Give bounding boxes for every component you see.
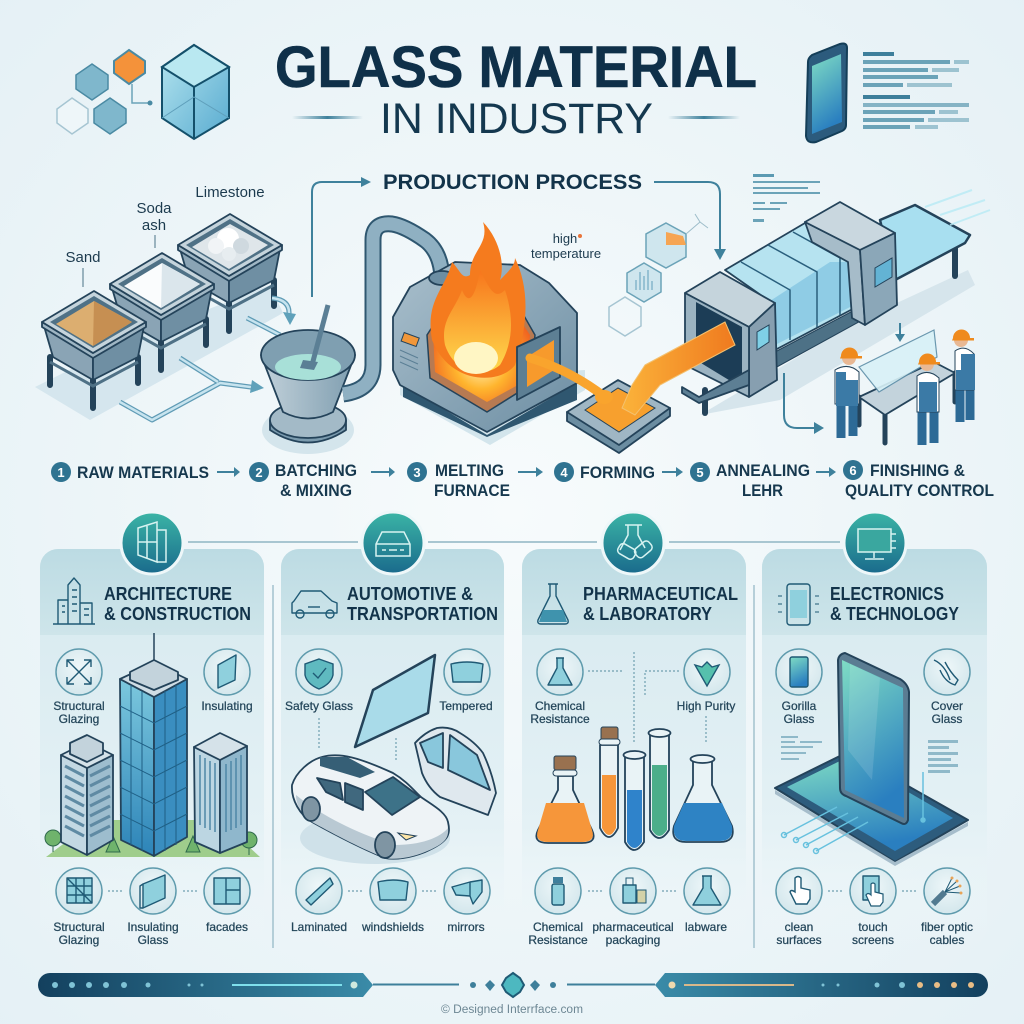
step 4 (554, 462, 655, 482)
icon: clean surfaces (776, 868, 822, 914)
step 1: RAW MATERIALS (77, 463, 209, 482)
arrow: lehr to finishing (784, 373, 824, 434)
icon: tablet with text lines (806, 44, 969, 142)
worker 1 (835, 348, 862, 438)
heading text (347, 584, 498, 624)
bin: sand (42, 291, 146, 408)
subtitle: IN INDUSTRY (380, 95, 653, 143)
illustration: green tube (648, 729, 670, 838)
illustration: shadow under lehr (700, 270, 975, 415)
bin: limestone (178, 214, 282, 331)
labels: cables (930, 933, 964, 947)
arrow (518, 467, 543, 477)
step 6: QUALITY CONTROL (845, 481, 994, 500)
label: soda ash: Soda (136, 200, 172, 217)
label: Chemical (535, 699, 585, 713)
process steps (51, 460, 994, 500)
step 6 (843, 460, 994, 500)
label: Tempered (439, 699, 493, 713)
heading text: & LABORATORY (583, 604, 712, 624)
illustration: pipe (343, 224, 442, 394)
illustration: raw material bins (35, 214, 296, 420)
arrow (662, 467, 683, 477)
illustration: right building (194, 733, 247, 853)
label: soda ash (136, 200, 172, 248)
heading icon: flask (538, 584, 568, 624)
heading icon: buildings (53, 578, 95, 624)
footer bar (38, 973, 988, 997)
illustration: annealing lehr (682, 202, 897, 413)
step 6: FINISHING & (870, 461, 965, 480)
labels: pharmaceutical (592, 920, 674, 934)
icon: laminated (296, 868, 342, 914)
labels (776, 920, 973, 947)
labels: Resistance (528, 933, 588, 947)
labels: packaging (606, 933, 660, 947)
labels: clean (785, 920, 813, 934)
left bar (38, 973, 373, 997)
icon: windshields (370, 868, 416, 914)
label: High Purity (677, 699, 735, 713)
illustration: tablet (775, 752, 968, 866)
labels: Insulating (127, 920, 179, 934)
entry housing (685, 272, 775, 327)
label (931, 699, 963, 726)
labels: mirrors (447, 920, 485, 934)
label: limestone: Limestone (195, 184, 265, 201)
panel: automotive and transportation (281, 512, 504, 945)
icon: structural glazing bottom (56, 868, 102, 914)
flame (431, 222, 526, 378)
center ornament (373, 973, 655, 997)
arrow: down to table (895, 323, 905, 342)
icon: vial (535, 868, 581, 914)
icon: insulating glass bottom (130, 868, 176, 914)
labels: Laminated (291, 920, 347, 934)
worker 2 (917, 354, 940, 445)
illustration: phone (838, 653, 909, 824)
icon: packaging (610, 868, 656, 914)
label: Gorilla (782, 699, 817, 713)
arrow: heading to lehr (654, 182, 726, 260)
title: GLASS MATERIAL (275, 35, 757, 100)
heading text (830, 584, 959, 624)
ground (46, 820, 260, 857)
heading text: ARCHITECTURE (104, 584, 232, 604)
illustration: mixing bowl (261, 305, 355, 454)
icon: gorilla glass (776, 649, 822, 695)
labels: Chemical (533, 920, 583, 934)
label: Glazing (59, 712, 99, 726)
right bar (655, 973, 988, 997)
label: high temperature: high (553, 231, 577, 246)
label (53, 699, 105, 726)
step 3 (407, 461, 510, 500)
icon: cover glass (924, 649, 970, 695)
illustration: car (292, 755, 450, 864)
labels: Structural (53, 920, 105, 934)
label (782, 699, 817, 726)
labels: surfaces (776, 933, 822, 947)
illustration: finishing table and workers (835, 330, 975, 445)
label: high temperature: temperature (531, 246, 601, 261)
labels: fiber optic (921, 920, 973, 934)
label: Glass (932, 712, 962, 726)
circuit lines (782, 772, 925, 854)
step 5: 5 (696, 465, 704, 480)
icon: tempered (444, 649, 490, 695)
step 3: 3 (413, 465, 421, 480)
text bars (781, 736, 958, 773)
support rail and leg (702, 390, 708, 413)
icon: hexagon data graphics (609, 214, 708, 336)
step 2: 2 (255, 465, 263, 480)
badge icon (121, 512, 183, 574)
step 2 (249, 461, 357, 500)
heading text: ELECTRONICS (830, 584, 944, 604)
label: Cover (931, 699, 963, 713)
icon: mirrors (444, 868, 490, 914)
heading text: PHARMACEUTICAL (583, 584, 738, 604)
column dividers (273, 585, 754, 948)
label: Safety Glass (285, 699, 353, 713)
labels (53, 920, 248, 947)
step 5: ANNEALING (716, 461, 810, 480)
icon: facades (204, 868, 250, 914)
heading text: AUTOMOTIVE & (347, 584, 473, 604)
labels: windshields (361, 920, 424, 934)
illustration: exit conveyor (880, 190, 990, 280)
illustration: car door (415, 728, 496, 815)
label: Resistance (530, 712, 590, 726)
illustration: windshield glass (355, 655, 435, 747)
label: sand (65, 249, 101, 287)
heading icon: car (292, 591, 337, 618)
step 4: 4 (560, 465, 568, 480)
bin: soda ash (110, 253, 214, 370)
step 3: MELTING (435, 461, 504, 480)
label: Structural (53, 699, 105, 713)
label: Glass (784, 712, 814, 726)
connector line behind badges (188, 541, 840, 543)
labels: facades (206, 920, 248, 934)
icon: labware (684, 868, 730, 914)
label: Insulating (201, 699, 253, 713)
icon: fiber optic cables (924, 868, 970, 914)
icon: safety glass (296, 649, 342, 695)
illustration: blue tube (624, 751, 646, 850)
illustration: orange flask (536, 756, 594, 843)
badge icon (602, 512, 664, 574)
step 2: & MIXING (280, 481, 352, 500)
illustration: left building (61, 735, 113, 855)
arrow (816, 467, 836, 477)
heading icon: phone (778, 584, 819, 625)
step 1: 1 (57, 465, 65, 480)
illustration: molten glass and forming mold (530, 322, 735, 453)
labels (528, 920, 727, 947)
icon: hexagon molecules and glass cube (57, 45, 229, 139)
subtitle (292, 95, 740, 143)
heading text (104, 584, 251, 624)
icon: touch screens (850, 868, 896, 914)
step 4: FORMING (580, 463, 655, 482)
worker 3 (952, 330, 975, 422)
labels: Glazing (59, 933, 99, 947)
trees (45, 830, 257, 855)
badge icon (844, 512, 906, 574)
illustration: orange tube (599, 727, 620, 837)
icon: structural glazing top (56, 649, 102, 695)
label: sand: Sand (65, 249, 101, 266)
label: high temperature (531, 231, 601, 261)
step 5: LEHR (742, 481, 783, 500)
labels: Glass (138, 933, 168, 947)
illustration: center tower (120, 633, 187, 856)
labels: screens (852, 933, 894, 947)
step 6: 6 (849, 463, 857, 478)
arrow: to production heading (312, 177, 371, 297)
badge icon (362, 512, 424, 574)
step 2: BATCHING (275, 461, 357, 480)
footer credit: © Designed Interrface.com (441, 1004, 583, 1016)
heading text: TRANSPORTATION (347, 604, 498, 624)
heading text: & CONSTRUCTION (104, 604, 251, 624)
panel: pharmaceutical and laboratory (522, 512, 746, 947)
heading: production process: PRODUCTION PROCESS (383, 171, 642, 194)
exit housing (805, 222, 865, 325)
label (530, 699, 590, 726)
icon: high purity (684, 649, 730, 695)
panel: electronics and technology (762, 512, 987, 947)
step 3: FURNACE (434, 481, 510, 500)
labels: touch (858, 920, 888, 934)
heading text (583, 584, 738, 624)
icon: insulating top (204, 649, 250, 695)
icon: chemical resistance top (537, 649, 583, 695)
labels: labware (685, 920, 727, 934)
heading text: & TECHNOLOGY (830, 604, 959, 624)
arrow (217, 467, 240, 477)
feed pipes (120, 298, 289, 420)
panel: architecture and construction (40, 512, 264, 947)
step 5 (690, 461, 810, 500)
labels (291, 920, 485, 934)
text lines near lehr (753, 174, 820, 222)
arrow (371, 467, 395, 477)
label: soda ash: ash (142, 217, 166, 234)
illustration: furnace (393, 222, 585, 445)
illustration: blue flask (673, 755, 733, 842)
